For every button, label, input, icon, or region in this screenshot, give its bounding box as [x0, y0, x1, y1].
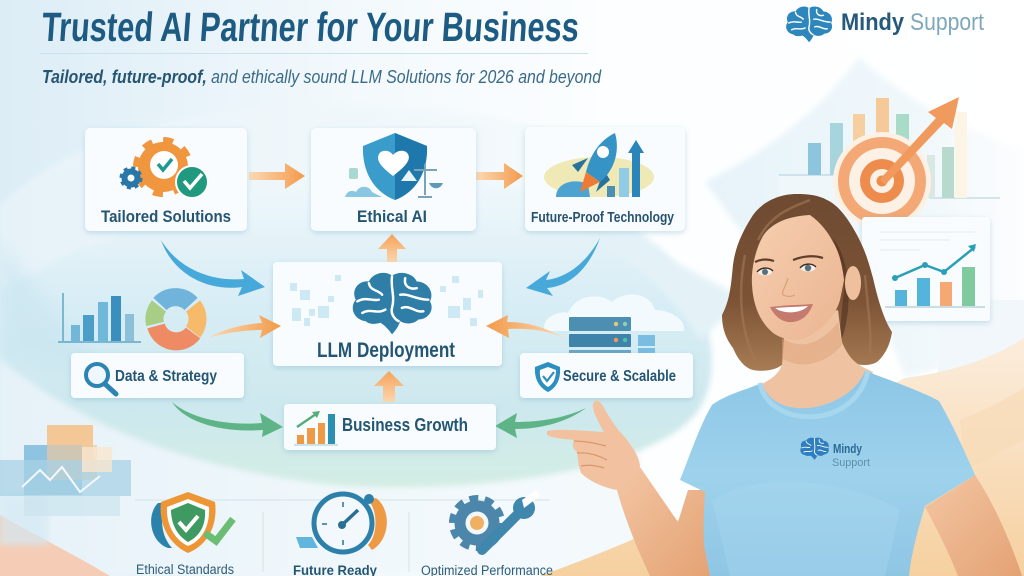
arrow: secure curve to deployment: [486, 315, 566, 339]
label: Future-Proof Technology: [531, 209, 675, 226]
label: Data & Strategy: [115, 368, 217, 385]
bottom item: Optimized Performance: [421, 490, 553, 576]
icon: gears with check: [121, 140, 208, 198]
mouth: [770, 304, 813, 322]
neck: [760, 310, 873, 417]
shirt logo: [800, 438, 870, 469]
title underline: [40, 53, 588, 54]
icon: rocket with growth: [544, 133, 654, 197]
pixel squares: [290, 275, 483, 326]
panel: Tailored Solutions: [85, 128, 247, 231]
label: Tailored Solutions: [101, 207, 231, 226]
arrow: deployment up to ethical: [378, 234, 406, 262]
subtitle: Tailored, future-proof, and ethically sound LLM Solutions for 2026 and beyond: [42, 67, 602, 87]
bottom item: Ethical Standards: [136, 492, 234, 576]
left arm: [617, 467, 712, 576]
finger creases: [574, 441, 607, 468]
label: LLM Deployment: [317, 339, 455, 362]
panel: Business Growth: [284, 404, 496, 450]
title: Trusted AI Partner for Your Business: [40, 4, 581, 50]
label: Secure & Scalable: [563, 368, 676, 385]
arrow: data curve to growth: [172, 402, 283, 437]
chart: bars with target and arrow: [779, 97, 1000, 236]
hair shadow: [833, 238, 848, 350]
logo: Mindy Support: [786, 6, 984, 42]
logo: Mindy Support: Support: [910, 9, 984, 36]
icon: brain: [353, 273, 432, 334]
arrow: data curve to deployment: [208, 315, 281, 338]
shirt highlights: [712, 482, 900, 576]
shirt logo: Support: [832, 457, 870, 469]
icon: shield check: [535, 362, 560, 392]
logo: Mindy Support: Mindy: [841, 9, 905, 36]
panel: Future-Proof Technology: [525, 127, 685, 231]
eyebrows: [755, 256, 823, 262]
arrow: secure curve to growth: [495, 408, 586, 438]
arrow: growth up to deployment: [374, 371, 404, 402]
arrow: future-proof curve to deployment: [526, 238, 600, 296]
arrow: ethical to future-proof: [476, 163, 523, 189]
icon: magnifier: [86, 364, 116, 394]
shirt logo: Mindy: [833, 441, 863, 456]
label: Ethical AI: [357, 207, 427, 226]
label: Business Growth: [342, 415, 468, 435]
panel: report with line chart: [862, 217, 990, 321]
panel: LLM Deployment: [273, 262, 502, 366]
icon: gear and wrench: [452, 490, 540, 550]
right arm: [925, 475, 1022, 576]
hair strands: [741, 200, 871, 360]
chart: donut: [154, 297, 198, 341]
nose: [783, 278, 795, 296]
icon: stopwatch: [296, 494, 387, 552]
ear: [845, 266, 861, 300]
panel: Secure & Scalable: [520, 353, 693, 398]
eyes: [757, 264, 816, 275]
icon: shield heart and scales: [345, 133, 443, 200]
arrow: tailored curve to deployment: [161, 240, 265, 296]
arrow: tailored to ethical: [249, 163, 305, 189]
neck shadow: [782, 322, 842, 364]
person pointing: [547, 194, 1022, 576]
panel: Ethical AI: [311, 128, 476, 231]
bottom divider lines: [135, 500, 550, 572]
server and cloud: [544, 294, 684, 353]
hand: [547, 401, 640, 490]
t-shirt: [680, 371, 975, 576]
chart: bars and axis: [58, 293, 141, 342]
bottom item: Future Ready: [293, 494, 387, 576]
icon: shield check: [151, 492, 233, 553]
hair: [722, 194, 892, 371]
left decorative squares with line chart: [0, 425, 131, 516]
panel: Data & Strategy: [71, 353, 244, 398]
icon: growth bars: [294, 411, 338, 445]
shirt collar: [760, 371, 868, 417]
face: [752, 215, 844, 340]
